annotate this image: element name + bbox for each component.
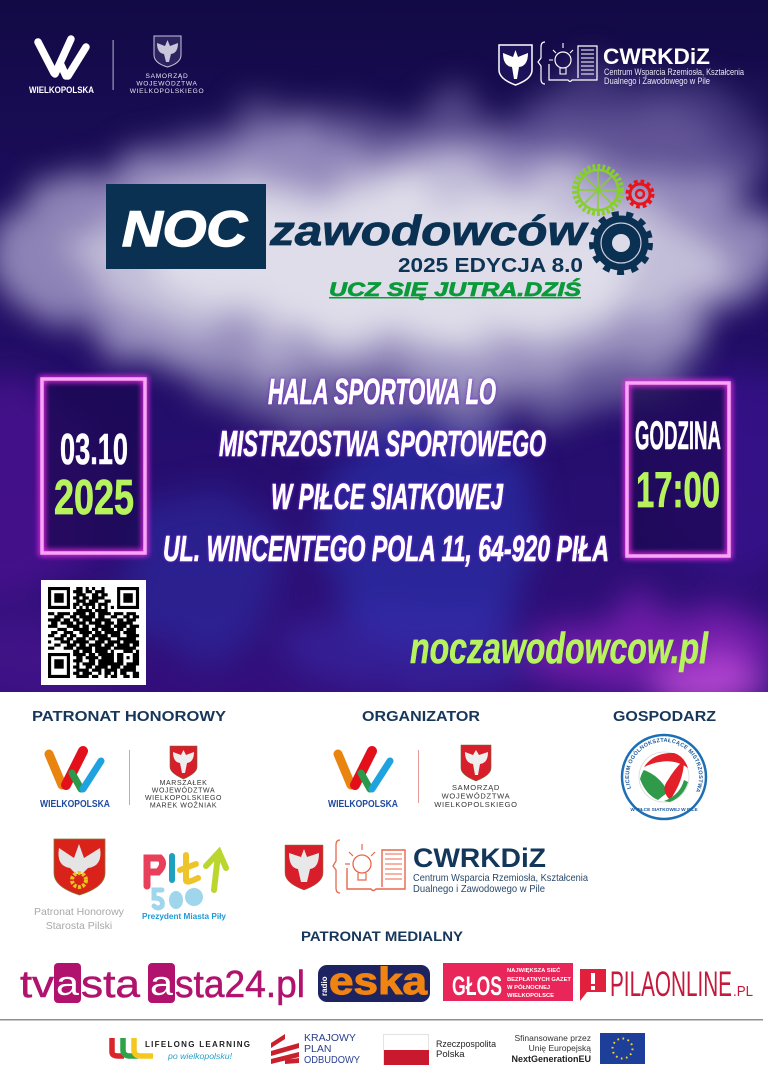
logo: gospodarz volleyball badge: W PIŁCE SIATKOWEJ W PILE	[630, 807, 698, 813]
logo: Rzeczpospolita Polska flag: Polska	[436, 1049, 465, 1060]
logo: Lifelong Learning: po wielkopolsku!	[167, 1051, 233, 1061]
header logo: Samorząd Województwa Wielkopolskiego: SAMORZĄD	[146, 73, 188, 80]
logo: powiat pilski shield: Patronat Honorowy	[34, 906, 125, 918]
logo: powiat pilski shield: Starosta Pilski	[46, 920, 112, 932]
logo: CWRKDiZ colour: Centrum Wsparcia Rzemiosła, Kształcenia	[413, 872, 588, 884]
event logo: Noc Zawodowców	[106, 166, 652, 301]
header logo: Samorząd Województwa Wielkopolskiego: WIELKOPOLSKIEGO	[130, 88, 204, 95]
logo: tv asta: sta	[81, 964, 141, 1006]
logo: NextGenerationEU: Sfinansowane przez	[514, 1033, 591, 1043]
logo: marszałek shield and text: MARSZAŁEK	[160, 780, 207, 787]
venue text block: MISTRZOSTWA SPORTOWEGO	[219, 423, 546, 464]
logo: CWRKDiZ colour: CWRKDiZ	[413, 843, 546, 873]
logo: Piła 500: Prezydent Miasta Piły	[142, 912, 227, 921]
logo: marszałek shield and text: MAREK WOŹNIAK	[150, 800, 217, 810]
logo: CWRKDiZ colour	[285, 840, 588, 895]
logo: Głos: BEZPŁATNYCH GAZET	[507, 977, 571, 983]
logo: NextGenerationEU: NextGenerationEU	[511, 1054, 591, 1064]
edition label: 2025 EDYCJA 8.0	[398, 255, 583, 277]
logo: samorząd shield and text: SAMORZĄD	[452, 783, 500, 792]
logo: Krajowy Plan Odbudowy: KRAJOWY	[304, 1032, 356, 1044]
logo: Wielkopolska colour, patronat: WIELKOPOLSKA	[40, 798, 110, 810]
venue text block: W PIŁCE SIATKOWEJ	[271, 476, 504, 517]
logo: Lifelong Learning: LIFELONG LEARNING	[145, 1040, 250, 1049]
logo: radio eska: radio	[320, 976, 329, 996]
logo: samorząd shield and text	[434, 745, 518, 809]
header logo: Wielkopolska white	[29, 39, 94, 96]
logo: samorząd shield and text: WIELKOPOLSKIEGO	[434, 800, 518, 809]
slogan: UCZ SIĘ JUTRA.DZIŚ	[329, 279, 581, 301]
logo: asta24.pl: sta24.pl	[175, 964, 305, 1006]
header logo: CWRKDiZ white: CWRKDiZ	[603, 44, 710, 69]
logo: Krajowy Plan Odbudowy: ODBUDOWY	[304, 1054, 360, 1066]
logo: CWRKDiZ colour: Dualnego i Zawodowego w Pile	[413, 883, 545, 895]
date frame	[42, 379, 145, 553]
logo: Lifelong Learning	[112, 1038, 250, 1061]
venue text block: HALA SPORTOWA LO	[268, 371, 496, 412]
NOC box: NOC	[122, 201, 248, 257]
logo: Piła 500	[142, 852, 227, 921]
logo: Rzeczpospolita Polska flag	[384, 1034, 497, 1065]
logo: marszałek shield and text: WIELKOPOLSKIEGO	[145, 795, 222, 802]
icon: red gear	[628, 182, 652, 206]
logo: radio eska: eska	[329, 961, 428, 1003]
time frame: 17:00	[636, 462, 720, 518]
heading: gospodarz: GOSPODARZ	[613, 709, 716, 725]
header logo: CWRKDiZ white: Dualnego i Zawodowego w Pile	[604, 76, 710, 86]
logo: samorząd shield and text: WOJEWÓDZTWA	[442, 792, 510, 800]
background: purple nebula with white cloud	[0, 0, 768, 710]
logo: asta24.pl: a	[150, 965, 173, 1003]
NOC box	[106, 184, 266, 269]
icon: navy gear	[592, 214, 650, 272]
logo: tv asta	[20, 963, 141, 1006]
white sponsors panel	[0, 692, 768, 1086]
logo: gospodarz volleyball badge	[620, 734, 708, 820]
logo: Wielkopolska colour, organizator	[328, 750, 419, 810]
logo: tv asta: a	[56, 965, 79, 1003]
icon: green gear	[574, 166, 622, 214]
logo: Głos	[443, 963, 573, 1001]
time frame	[627, 383, 729, 556]
logo: Wielkopolska colour, organizator: WIELKOPOLSKA	[328, 798, 398, 810]
logo: marszałek shield and text	[145, 746, 222, 810]
logo: Krajowy Plan Odbudowy: PLAN	[304, 1043, 331, 1055]
logo: Rzeczpospolita Polska flag: Rzeczpospolita	[436, 1039, 497, 1050]
header logo: Wielkopolska white: WIELKOPOLSKA	[29, 85, 94, 96]
heading: patronat medialny: PATRONAT MEDIALNY	[301, 929, 463, 944]
header logo: Samorząd Województwa Wielkopolskiego: WOJEWÓDZTWA	[136, 78, 198, 88]
logo: NextGenerationEU: Unię Europejską	[529, 1043, 591, 1053]
logo: tv asta: tv	[20, 964, 54, 1006]
logo: NextGenerationEU	[511, 1033, 645, 1064]
logo: powiat pilski shield	[34, 839, 125, 932]
QR code	[41, 580, 146, 685]
date frame: 2025	[54, 471, 134, 525]
divider	[0, 1019, 763, 1020]
logo: Krajowy Plan Odbudowy	[271, 1032, 360, 1066]
venue text block	[163, 371, 609, 569]
logo: gospodarz volleyball badge: LICEUM OGÓLNOKSZTAŁCĄCE MISTRZOSTWA SPORTOWEGO	[625, 738, 703, 792]
logo: marszałek shield and text: WOJEWÓDZTWA	[152, 786, 215, 794]
logo: Głos: W PÓŁNOCNEJ	[507, 983, 550, 991]
logo: Głos: GŁOS	[452, 971, 502, 1001]
logo: Głos: NAJWIĘKSZA SIEĆ	[507, 966, 561, 974]
logo: Głos: WIELKOPOLSCE	[507, 993, 554, 999]
date frame: 03.10	[60, 425, 128, 474]
heading: organizator: ORGANIZATOR	[362, 709, 481, 725]
header logo: CWRKDiZ white	[499, 42, 744, 86]
header logo: Samorząd Województwa Wielkopolskiego	[113, 36, 204, 95]
logo: Piła Online: .PL	[733, 983, 753, 1000]
heading: patronat honorowy: PATRONAT HONOROWY	[32, 709, 226, 725]
logo: Wielkopolska colour, patronat	[40, 750, 130, 810]
zawodowców wordmark: zawodowców	[269, 207, 589, 254]
